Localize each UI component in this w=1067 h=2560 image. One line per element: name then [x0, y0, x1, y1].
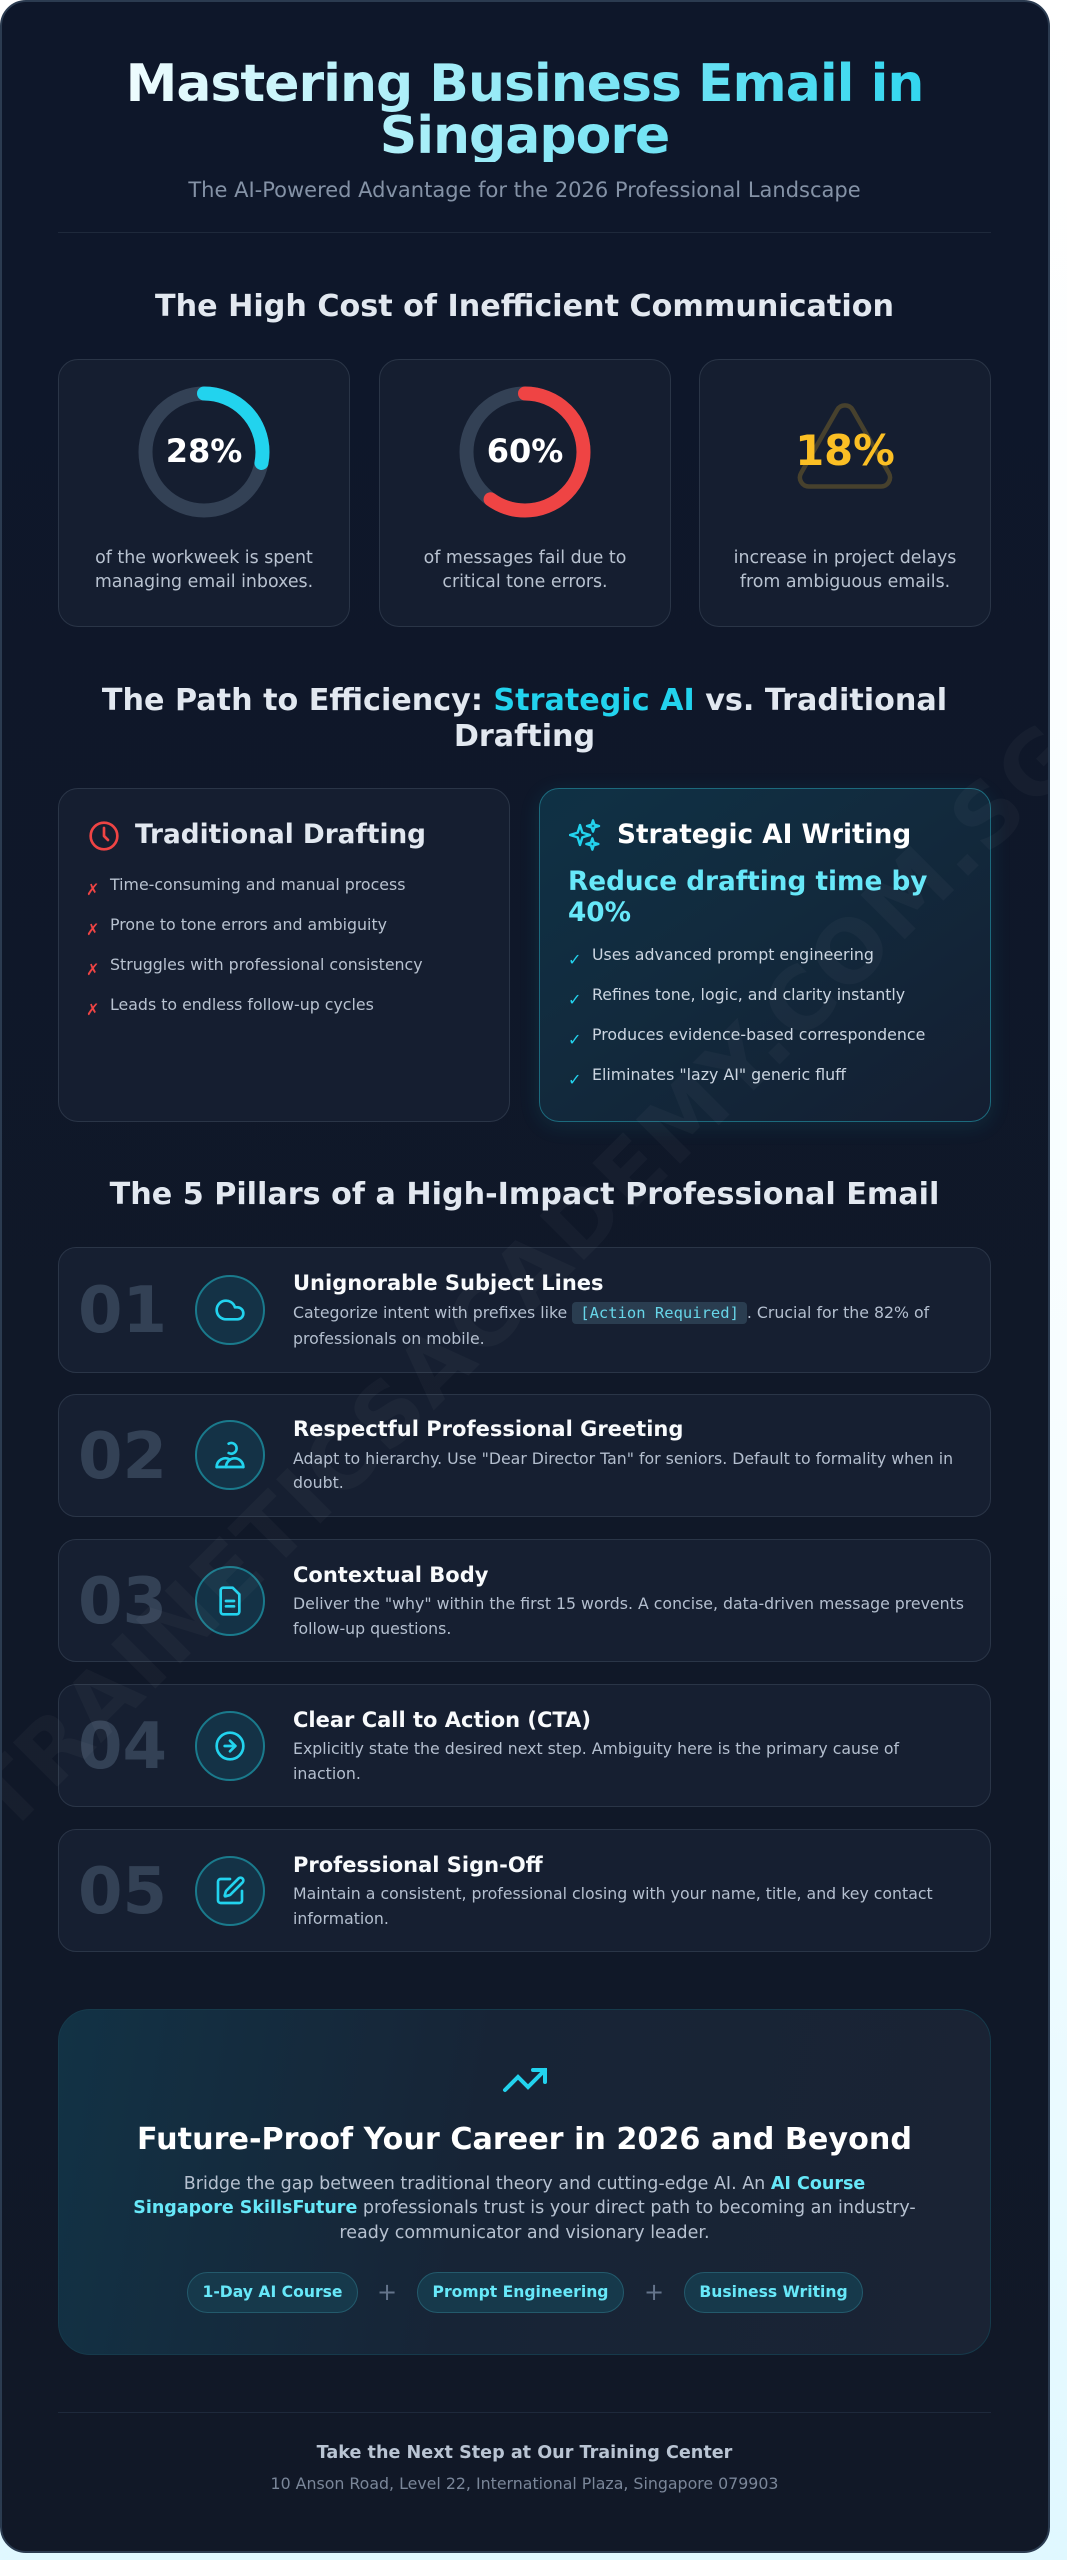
highlight statement: 40% — [568, 898, 631, 928]
cta paragraph: Singapore SkillsFuture professionals trust is your direct path to becoming an industry- — [133, 2198, 916, 2218]
icon: clock — [89, 821, 119, 851]
pillar description: Explicitly state the desired next step. Ambiguity here is the primary cause of — [293, 1739, 899, 1758]
icon: trending up — [502, 2068, 548, 2092]
icon: greeting person — [195, 1420, 265, 1490]
list item: Refines tone, logic, and clarity instantly — [592, 984, 905, 1004]
pillar description: Categorize intent with prefixes like [Action Required] . Crucial for the 82% of — [293, 1303, 929, 1322]
number: 02 — [78, 1420, 167, 1494]
icon: warning triangle with 18%: 18% — [795, 426, 895, 475]
title: Singapore — [380, 106, 669, 166]
heading: path to efficiency: The Path to Efficiency: Strategic AI vs. Traditional — [102, 683, 947, 718]
drawbacks list — [86, 875, 423, 1019]
footer address: 10 Anson Road, Level 22, International Plaza, Singapore 079903 — [271, 2474, 778, 2492]
stat label: from ambiguous emails. — [740, 572, 950, 592]
subtitle: The AI-Powered Advantage for the 2026 Professional Landscape — [188, 178, 861, 202]
panel: strategic AI writing: ✓ — [568, 950, 581, 968]
donut chart: 60%: 60% — [487, 432, 563, 470]
panel: traditional drafting: ✗ — [86, 1000, 99, 1019]
pillar 01 — [58, 1247, 991, 1373]
pillar description: follow-up questions. — [293, 1619, 451, 1638]
cta paragraph — [133, 2174, 916, 2242]
course pill: Business Writing — [699, 2283, 848, 2301]
pillar title: Contextual Body — [293, 1563, 488, 1587]
donut chart: 28% — [138, 386, 270, 518]
stat label: critical tone errors. — [442, 572, 608, 592]
pillar description: Adapt to hierarchy. Use "Dear Director Tan" for seniors. Default to formality when in — [293, 1449, 953, 1468]
pillar description — [293, 1302, 930, 1348]
donut chart: 28%: 28% — [166, 432, 242, 470]
list item: Produces evidence-based correspondence — [592, 1024, 925, 1044]
pillar description — [293, 1449, 953, 1492]
stat label: increase in project delays — [734, 548, 956, 568]
list item: Struggles with professional consistency — [110, 955, 423, 974]
donut chart: 60% — [460, 386, 590, 518]
list item: Time-consuming and manual process — [110, 875, 405, 894]
panel: traditional drafting: ✗ — [86, 920, 99, 939]
icon: cloud — [195, 1275, 265, 1345]
pillar description — [293, 1739, 900, 1783]
pillar title: Professional Sign-Off — [293, 1853, 543, 1877]
panel: call to action — [58, 2009, 991, 2355]
stat label — [734, 548, 956, 592]
pillar description — [293, 1594, 964, 1638]
panel: traditional drafting: ✗ — [86, 880, 99, 899]
number: 04 — [78, 1710, 167, 1784]
pillar 05 — [58, 1829, 991, 1952]
icon: edit pencil — [195, 1856, 265, 1926]
panel: traditional drafting: ✗ — [86, 960, 99, 979]
list item: Uses advanced prompt engineering — [592, 944, 874, 964]
panel: stat 18% — [699, 359, 991, 627]
course pill — [684, 2272, 863, 2313]
pillar 04 — [58, 1684, 991, 1807]
pillar description: Deliver the "why" within the first 15 words. A concise, data-driven message prevents — [293, 1594, 964, 1613]
pillar description: Maintain a consistent, professional closing with your name, title, and key contact — [293, 1884, 933, 1903]
pillar description: professionals on mobile. — [293, 1329, 485, 1348]
plus sign: + — [377, 2278, 397, 2306]
stat label — [95, 548, 313, 592]
number: 03 — [78, 1565, 167, 1639]
pillar description — [293, 1884, 933, 1928]
pillar description: information. — [293, 1909, 389, 1928]
title: Mastering Business Email in — [126, 54, 923, 114]
stat label — [424, 548, 626, 592]
cta heading: Future-Proof Your Career in 2026 and Beyond — [137, 2122, 912, 2157]
plus sign: + — [644, 2278, 664, 2306]
heading: path to efficiency: Drafting — [454, 719, 595, 754]
icon: warning triangle with 18% — [795, 403, 895, 489]
panel: stat 28% — [58, 359, 350, 627]
number: 05 — [78, 1855, 167, 1929]
list item: Prone to tone errors and ambiguity — [110, 915, 387, 934]
course pill — [417, 2272, 624, 2313]
panel: traditional drafting — [58, 788, 510, 1122]
icon: arrow in circle — [195, 1711, 265, 1781]
panel: strategic AI writing: ✓ — [568, 1070, 581, 1088]
pillar 03 — [58, 1539, 991, 1662]
pillar title: Unignorable Subject Lines — [293, 1271, 604, 1295]
course pill: 1-Day AI Course — [202, 2283, 342, 2301]
panel: strategic AI writing: ✓ — [568, 1030, 581, 1048]
footer heading: Take the Next Step at Our Training Center — [317, 2443, 732, 2463]
benefits list — [568, 944, 925, 1088]
course pill — [187, 2272, 358, 2313]
icon: sparkles — [569, 819, 600, 851]
stat label: managing email inboxes. — [95, 572, 313, 592]
stat label: of messages fail due to — [424, 548, 626, 568]
stat label: of the workweek is spent — [95, 548, 313, 568]
icon: document — [195, 1566, 265, 1636]
heading: high cost: The High Cost of Inefficient Communication — [155, 289, 894, 324]
highlight statement — [568, 866, 927, 928]
cta paragraph: ready communicator and visionary leader. — [339, 2222, 710, 2242]
pillar description: inaction. — [293, 1764, 361, 1783]
pillar title: Clear Call to Action (CTA) — [293, 1708, 591, 1732]
pillar title: Respectful Professional Greeting — [293, 1417, 683, 1441]
heading: path to efficiency — [102, 683, 947, 754]
list item: Eliminates "lazy AI" generic fluff — [592, 1064, 846, 1084]
list item: Leads to endless follow-up cycles — [110, 995, 374, 1014]
pillar description: doubt. — [293, 1473, 344, 1492]
panel: stat 60% — [379, 359, 671, 627]
highlight statement: Reduce drafting time by — [568, 866, 927, 896]
pillar 02 — [58, 1394, 991, 1517]
panel: strategic AI writing: ✓ — [568, 990, 581, 1008]
number: 01 — [78, 1274, 167, 1348]
cta paragraph: Bridge the gap between traditional theory and cutting-edge AI. An AI Course — [184, 2174, 865, 2194]
panel heading: Strategic AI Writing — [617, 820, 911, 850]
panel: strategic AI writing — [539, 788, 991, 1122]
panel heading: Traditional Drafting — [135, 820, 426, 850]
course pill: Prompt Engineering — [433, 2283, 608, 2301]
heading: five pillars: The 5 Pillars of a High-Impact Professional Email — [110, 1177, 939, 1212]
title — [58, 58, 991, 162]
